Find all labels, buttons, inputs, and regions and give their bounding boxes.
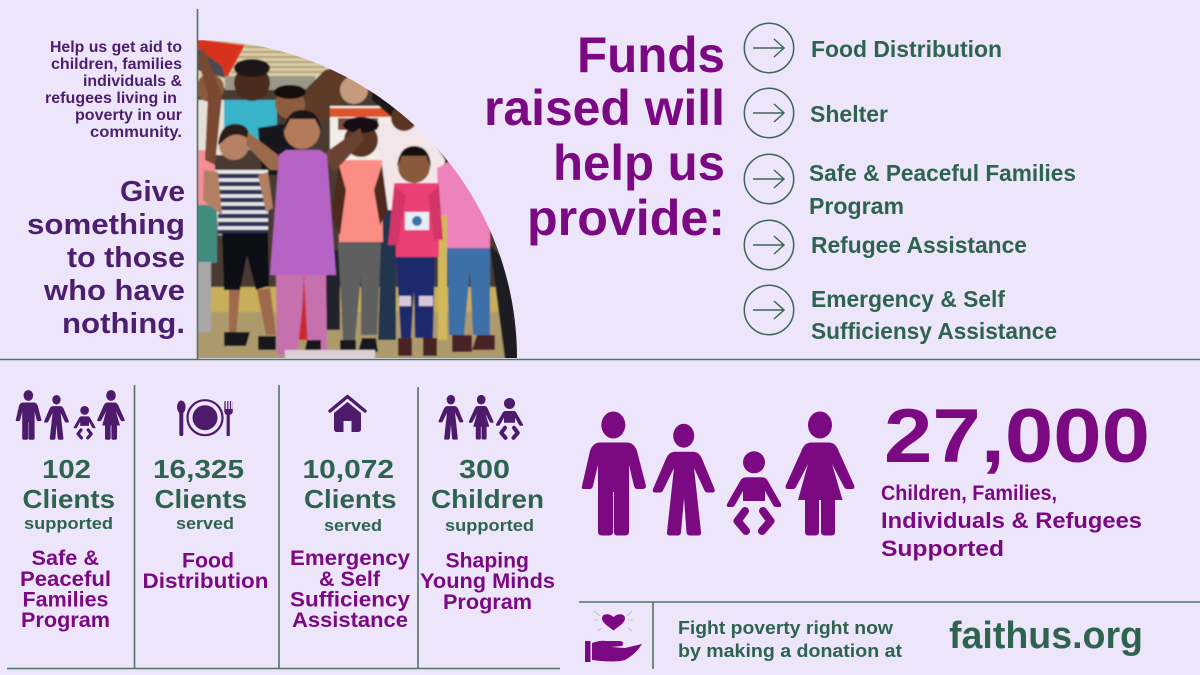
heading: give something: who have <box>43 275 185 307</box>
icon: arrow circle shelter <box>744 88 794 138</box>
list: funded services: Safe & Peaceful Families <box>809 160 1076 186</box>
list: funded services: Program <box>809 193 904 219</box>
list: funded services: Refugee Assistance <box>811 232 1027 258</box>
heading: funds raised: raised will <box>484 80 725 136</box>
caption: people supported: Individuals & Refugees <box>881 508 1142 533</box>
stat: food distribution: Food <box>182 550 234 572</box>
heading: funds raised: help us <box>553 135 725 191</box>
text block: help us intro: Help us get aid to <box>50 39 182 56</box>
list: funded services: Food Distribution <box>811 36 1002 62</box>
text block: call to action <box>678 618 902 661</box>
stat: safe and peaceful families: Families <box>22 588 108 612</box>
stat: food distribution: Distribution <box>142 570 268 593</box>
heading: give something: to those <box>67 242 185 274</box>
website link text: faithus.org <box>949 615 1143 657</box>
stat: safe and peaceful families: Clients <box>22 484 115 514</box>
text block: help us intro: community. <box>90 124 182 141</box>
icon: arrow circle food <box>744 23 794 73</box>
icon: house <box>330 396 365 432</box>
text block: help us intro <box>45 39 182 141</box>
caption: people supported <box>881 482 1142 561</box>
text block: help us intro: poverty in our <box>75 107 182 124</box>
stat: emergency and self sufficiency: Assistance <box>292 609 408 632</box>
stat: shaping young minds: Children <box>431 484 544 514</box>
stat: emergency and self sufficiency: 10,072 <box>302 454 394 484</box>
stat: emergency and self sufficiency: & Self <box>319 568 381 591</box>
icon: arrow circle emergency <box>744 285 794 335</box>
text block: help us intro: children, families <box>51 56 182 73</box>
stat: safe and peaceful families <box>16 390 125 632</box>
list: funded services: Shelter <box>810 101 888 127</box>
photo: group of smiling children in a quarter-circle crop <box>196 40 522 360</box>
stat: shaping young minds <box>420 395 555 614</box>
stat: emergency and self sufficiency <box>290 396 410 632</box>
stat: shaping young minds: Young Minds <box>420 570 555 593</box>
icon: family <box>16 390 125 440</box>
icon: plate and cutlery <box>177 400 233 436</box>
text block: help us intro: refugees living in <box>45 90 177 107</box>
stat: food distribution: served <box>176 514 234 533</box>
icon: arrow circle refugee <box>744 220 794 270</box>
list: funded services: Emergency & Self <box>811 286 1005 312</box>
stat: shaping young minds: supported <box>445 516 534 535</box>
heading: give something <box>27 176 185 340</box>
stat: food distribution: 16,325 <box>153 454 244 484</box>
text block: help us intro: individuals & <box>83 73 182 90</box>
heading: give something: nothing. <box>62 308 185 340</box>
stat: shaping young minds: Shaping <box>446 550 529 572</box>
stat: emergency and self sufficiency: Emergency <box>290 547 410 570</box>
text block: call to action: by making a donation at <box>678 641 902 661</box>
icon: large family <box>582 412 854 536</box>
vertical divider beside photo <box>196 9 198 359</box>
stat: food distribution <box>142 400 268 593</box>
stat: food distribution: Clients <box>154 484 247 514</box>
stat: emergency and self sufficiency: Clients <box>304 484 396 514</box>
stat: shaping young minds: 300 <box>459 454 510 484</box>
horizontal section divider <box>0 358 1200 360</box>
heading: funds raised <box>484 27 725 246</box>
stat: safe and peaceful families: supported <box>24 514 113 533</box>
big number: total supported: 27,000 <box>884 394 1150 479</box>
list: funded services: Sufficiensy Assistance <box>811 318 1057 344</box>
stat: emergency and self sufficiency: served <box>324 516 382 535</box>
icon: arrow circle families <box>744 154 794 204</box>
stat column dividers <box>7 385 560 668</box>
stat: safe and peaceful families: Peaceful <box>20 568 111 591</box>
donation bar dividers <box>579 602 1200 669</box>
text block: call to action: Fight poverty right now <box>678 618 894 638</box>
heading: funds raised: Funds <box>577 27 725 83</box>
icon: hand holding heart <box>585 611 642 662</box>
stat: safe and peaceful families: Safe & <box>32 547 99 570</box>
caption: people supported: Children, Families, <box>881 482 1057 505</box>
heading: give something: something <box>27 209 185 241</box>
list: funded services <box>744 23 1076 344</box>
heading: give something: Give <box>120 176 185 208</box>
icon: children <box>438 395 523 440</box>
stat: safe and peaceful families: Program <box>21 609 110 632</box>
stat: shaping young minds: Program <box>443 591 532 614</box>
stat: emergency and self sufficiency: Sufficiency <box>290 588 410 612</box>
caption: people supported: Supported <box>881 536 1004 561</box>
heading: funds raised: provide: <box>527 190 725 246</box>
stat: safe and peaceful families: 102 <box>42 454 91 484</box>
